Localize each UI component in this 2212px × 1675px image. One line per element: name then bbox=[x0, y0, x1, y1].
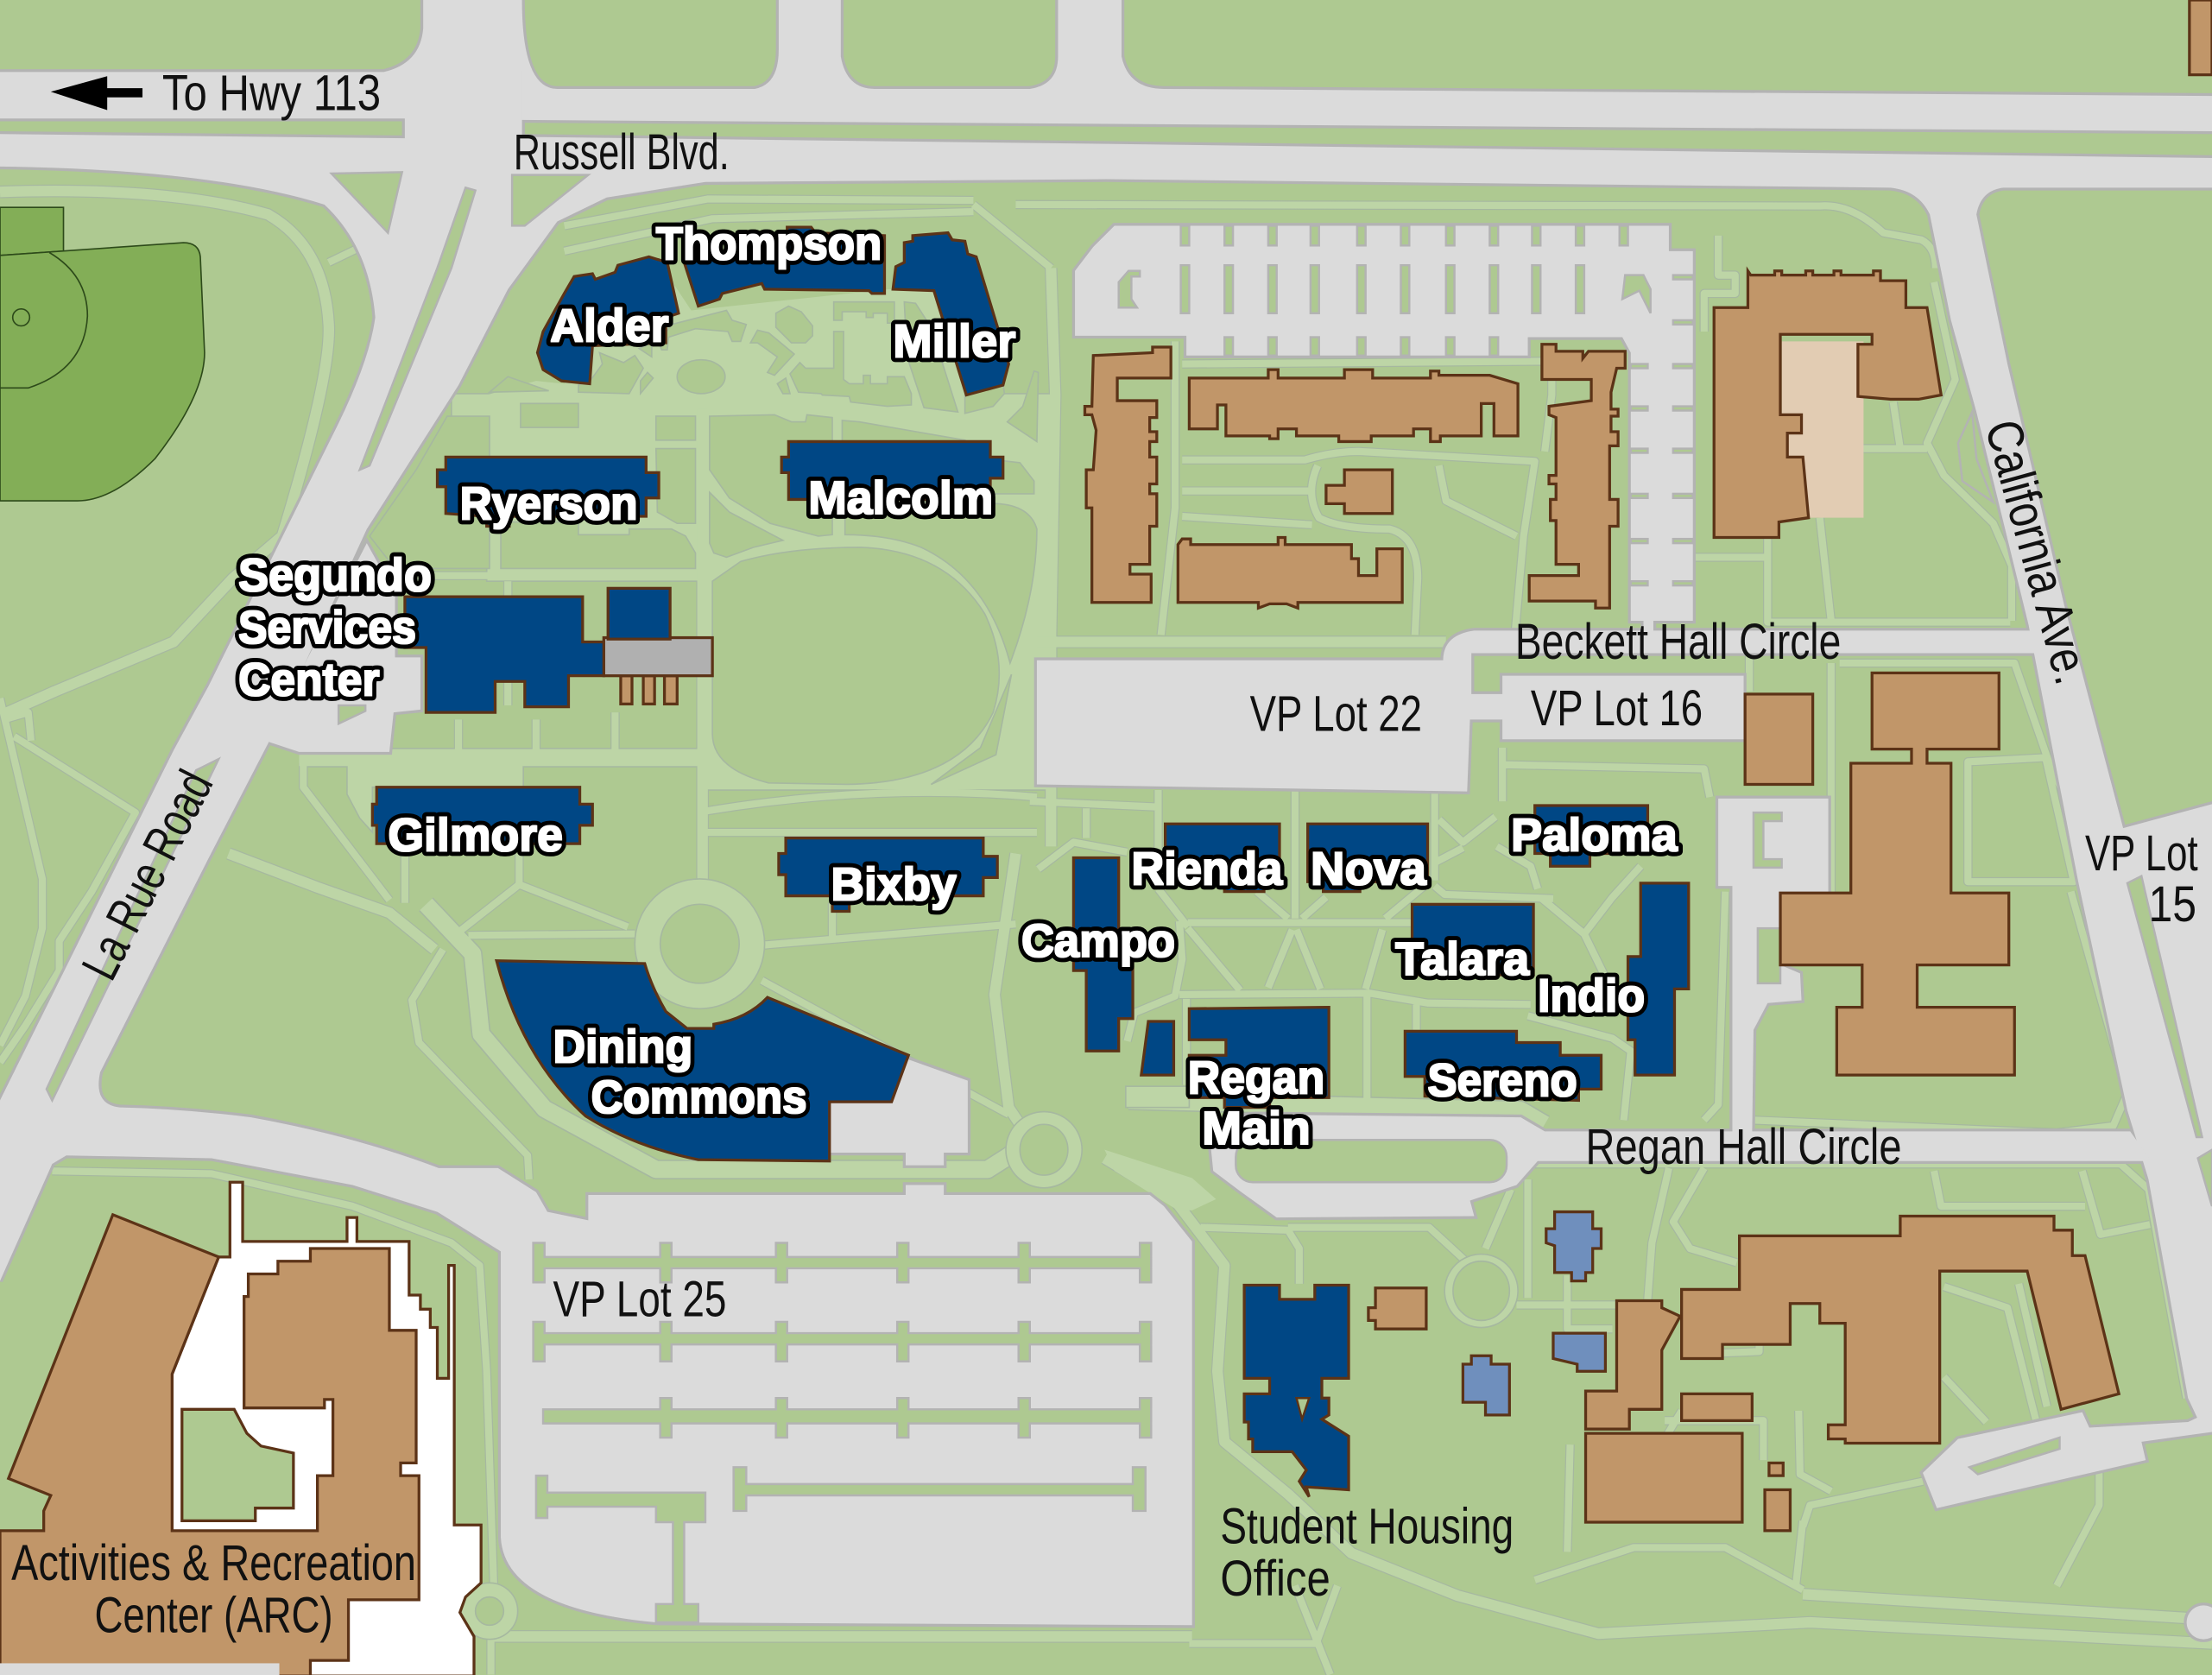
building: Sereno bbox=[1405, 1031, 1602, 1100]
navy residence buildings bbox=[372, 227, 1689, 1497]
label: California Ave.: California Ave. bbox=[1974, 414, 2101, 690]
building: Talara bbox=[1413, 904, 1533, 975]
label: Paloma: Paloma bbox=[1511, 809, 1678, 861]
label: Office: Office bbox=[1220, 1551, 1330, 1607]
label: Student Housing: Student Housing bbox=[1220, 1499, 1514, 1555]
building: Student Housing Office bbox=[1244, 1286, 1349, 1497]
ARC courtyard bbox=[182, 1409, 294, 1520]
parking lot north: landscaped slots bbox=[1119, 225, 1693, 585]
building: Activities & Recreation Center bbox=[0, 1215, 419, 1675]
building: Thompson bbox=[684, 227, 884, 307]
building: Segundo annex bbox=[608, 588, 670, 639]
building: Rienda bbox=[1166, 824, 1280, 892]
label: Thompson: Thompson bbox=[656, 218, 882, 270]
label: Center: Center bbox=[238, 654, 380, 706]
label: Gilmore: Gilmore bbox=[388, 809, 563, 861]
label: Segundo: Segundo bbox=[238, 550, 432, 602]
label: Indio: Indio bbox=[1538, 970, 1645, 1022]
label: Regan: Regan bbox=[1188, 1052, 1324, 1103]
building: Indio bbox=[1628, 883, 1689, 1075]
label: Rienda: Rienda bbox=[1131, 843, 1283, 894]
label: Commons: Commons bbox=[591, 1071, 807, 1123]
road islands and medians bbox=[47, 172, 2212, 1474]
label: Main: Main bbox=[1202, 1103, 1311, 1154]
baseball field bbox=[0, 207, 205, 501]
label: Center (ARC): Center (ARC) bbox=[94, 1587, 333, 1643]
building: Bixby bbox=[779, 838, 997, 912]
building: Campo bbox=[1073, 857, 1133, 1051]
label: Ryerson: Ryerson bbox=[460, 477, 638, 529]
label: Sereno: Sereno bbox=[1428, 1055, 1577, 1107]
label: Campo: Campo bbox=[1021, 915, 1175, 967]
building: Nova bbox=[1308, 824, 1428, 892]
building: Alder bbox=[538, 256, 679, 383]
building: Paloma bbox=[1535, 806, 1647, 866]
tan campus buildings bbox=[621, 0, 2212, 1531]
label: VP Lot 16: VP Lot 16 bbox=[1531, 680, 1703, 736]
label: Russell Blvd.: Russell Blvd. bbox=[514, 124, 730, 180]
label: Dining: Dining bbox=[553, 1021, 692, 1072]
label: Services: Services bbox=[238, 602, 416, 654]
building: Miller bbox=[893, 233, 1008, 395]
building name labels bbox=[238, 218, 1678, 1154]
grey service structure bbox=[604, 638, 712, 676]
building: Gilmore bbox=[372, 787, 592, 844]
label: Beckett Hall Circle: Beckett Hall Circle bbox=[1515, 614, 1841, 670]
label: Talara: Talara bbox=[1395, 933, 1530, 985]
label: Nova: Nova bbox=[1311, 843, 1427, 894]
building: Ryerson bbox=[438, 457, 659, 526]
building: Regan annex bbox=[1141, 1021, 1173, 1075]
label: Bixby: Bixby bbox=[831, 858, 957, 910]
label: To Hwy 113: To Hwy 113 bbox=[162, 65, 381, 121]
label: VP Lot 22: VP Lot 22 bbox=[1250, 686, 1422, 742]
icon: arrow to Hwy 113 bbox=[51, 76, 142, 110]
label: Regan Hall Circle: Regan Hall Circle bbox=[1586, 1119, 1902, 1175]
building: Regan Main bbox=[1189, 1008, 1329, 1108]
label: Miller: Miller bbox=[893, 315, 1015, 367]
building: Dining Commons bbox=[496, 961, 908, 1161]
slate-blue buildings bbox=[1463, 1212, 1605, 1415]
Student Housing courtyard notch bbox=[1297, 1398, 1309, 1419]
label: La Rue Road: La Rue Road bbox=[72, 762, 224, 989]
building: Malcolm bbox=[781, 441, 1003, 499]
label: 15: 15 bbox=[2148, 876, 2196, 932]
label: Malcolm: Malcolm bbox=[808, 472, 993, 524]
VP Lot 25 islands bbox=[534, 1243, 1151, 1622]
label: Activities & Recreation: Activities & Recreation bbox=[11, 1535, 416, 1591]
label: VP Lot 25: VP Lot 25 bbox=[553, 1271, 726, 1327]
ARC service strip bbox=[0, 1663, 280, 1675]
building: Segundo Services Center bbox=[405, 597, 604, 712]
building: Activities & Recreation Center surroundings bbox=[172, 1182, 481, 1675]
label: Alder: Alder bbox=[550, 300, 668, 351]
